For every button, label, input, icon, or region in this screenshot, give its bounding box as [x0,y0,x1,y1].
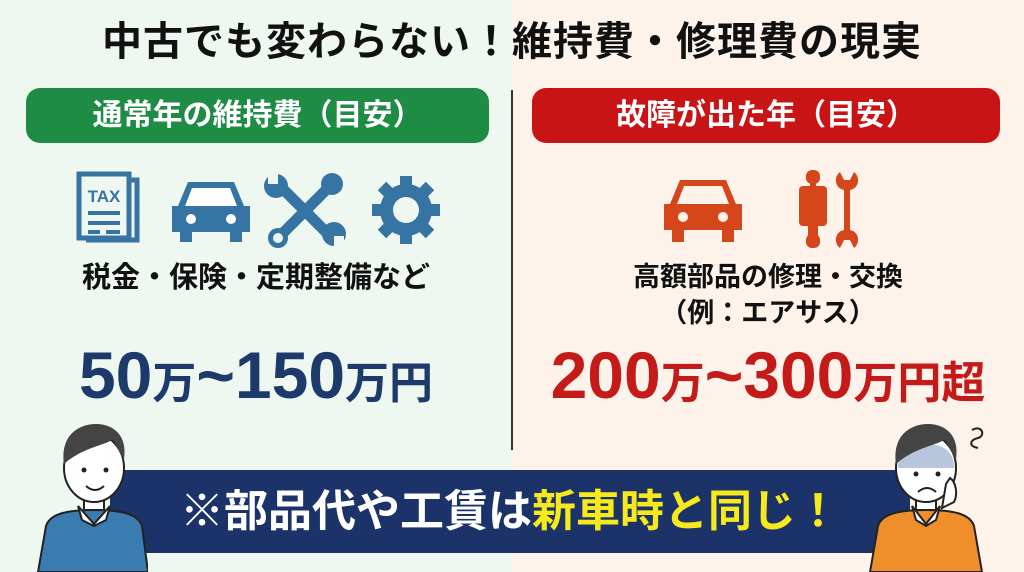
banner: ※部品代や工賃は新車時と同じ！ [180,487,840,536]
panel: breakdown year [532,88,1000,412]
heading: breakdown year [532,88,1000,143]
text: normal items: 税金・保険・定期整備など [82,262,430,294]
title: 中古でも変わらない！維持費・修理費の現実 [102,20,922,64]
text: breakdown items [633,262,903,328]
icons: tax car tools gear [76,172,440,248]
icons: tax car tools gear: TAX [88,187,121,206]
heading: breakdown year: 故障が出た年（目安） [616,99,916,132]
heading: normal year [26,88,489,143]
heading: normal year: 通常年の維持費（目安） [92,99,422,132]
icons: car, shock absorber, wrench [664,170,858,248]
text: breakdown items: 高額部品の修理・交換 [633,262,903,292]
banner [110,470,910,553]
amount: breakdown: 200万~300万円超 [551,338,985,412]
person: worried man [869,424,984,572]
panel: normal year [26,88,489,412]
text: breakdown items: （例：エアサス） [660,298,876,328]
divider [511,90,513,450]
person: calm man [37,424,148,572]
amount: normal: 50万~150万円 [79,338,433,412]
